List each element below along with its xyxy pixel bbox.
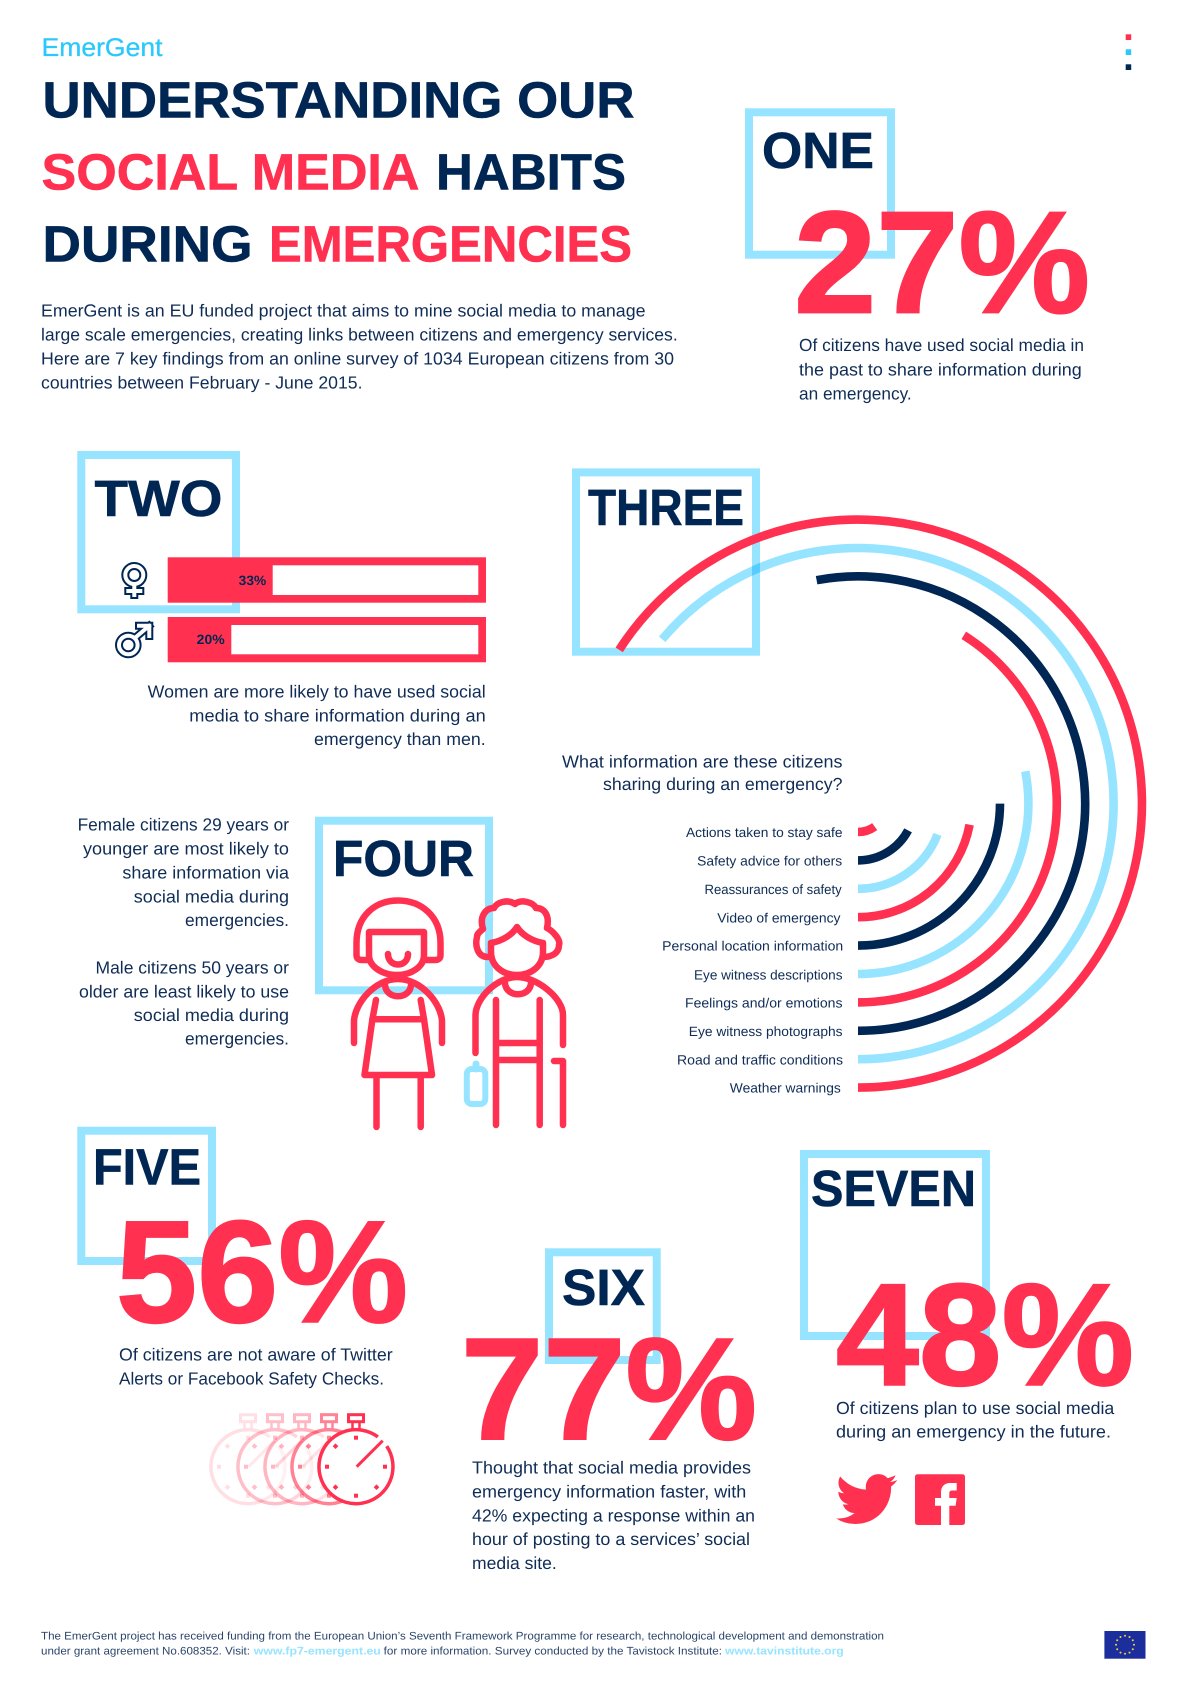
intro text: EmerGent is an EU funded project that aims to mine social media to manage [41,301,646,321]
chart labels: Personal location information [662,939,843,954]
number box four [319,821,489,990]
description six: media site. [472,1553,557,1573]
bar: men 20%: 20% [197,632,225,647]
chart labels: Reassurances of safety [704,882,842,897]
intro text: countries between February - June 2015. [41,372,362,392]
description four: share information via [122,862,289,882]
number box seven [804,1154,986,1336]
number box five [81,1131,212,1261]
title: HABITS [436,144,626,201]
description five [119,1345,393,1389]
chart labels: Weather warnings [730,1081,841,1096]
description one: Of citizens have used social media in [799,335,1084,355]
panel: finding three [562,472,1142,1096]
description four: younger are most likely to [83,839,289,859]
footer text: www.tavinstitute.org [724,1645,844,1657]
panel: finding five [81,1131,408,1504]
description four: emergencies. [185,910,289,930]
description four: social media during [134,886,289,906]
icon: twitter bird [836,1474,897,1524]
icon: female symbol [125,566,143,595]
description five: Of citizens are not aware of Twitter [119,1345,393,1365]
icon: older woman [476,901,563,1125]
footer text: The EmerGent project has received funding from the European Union’s Seventh Framework Programme for research, technological development and demonstration [41,1630,884,1642]
description one: an emergency. [799,384,912,404]
chart labels: Eye witness descriptions [694,967,843,982]
title: EMERGENCIES [269,215,632,272]
intro text: large scale emergencies, creating links between citizens and emergency services. [41,325,678,345]
icon: male symbol [119,626,149,654]
logo: EmerGent: EmerGent [42,34,162,62]
number box one [749,112,891,255]
description four [78,815,289,1049]
panel: finding six [461,1252,757,1573]
number box six [549,1252,657,1360]
stat: 48%: 48% [836,1254,1134,1416]
radial arc chart [619,520,1142,1088]
title: DURING [42,215,252,272]
description six [472,1457,755,1573]
description six: 42% expecting a response within an [472,1506,755,1526]
bar: women 33%: 33% [239,573,266,588]
heading: ONE: ONE [762,122,874,179]
stat: 56%: 56% [116,1191,408,1353]
description six: emergency information faster, with [472,1481,746,1501]
description four: Male citizens 50 years or [96,957,289,977]
description two [148,681,486,749]
description two: emergency than men. [314,729,486,749]
question text [562,752,843,794]
icon: fading stopwatches [211,1415,393,1504]
description two: media to share information during an [189,705,486,725]
chart labels [662,825,843,1096]
description seven [836,1398,1115,1442]
bar: men 20% [168,617,486,662]
bar: women 33% [168,557,486,603]
heading: FOUR: FOUR [333,830,474,887]
heading: TWO: TWO [94,470,222,527]
title [42,71,634,272]
chart labels: Feelings and/or emotions [685,996,843,1010]
description seven: during an emergency in the future. [836,1422,1111,1442]
footer text: under grant agreement No.608352. Visit: [41,1645,250,1657]
heading: FIVE: FIVE [93,1139,201,1196]
icon: handbag [467,1064,485,1104]
stat: 77%: 77% [461,1308,757,1470]
description six: hour of posting to a services’ social [472,1529,750,1549]
description four: emergencies. [185,1029,289,1049]
icon: young woman [354,900,442,1127]
description four: Female citizens 29 years or [78,815,289,835]
description four: social media during [134,1005,289,1025]
question text: sharing during an emergency? [603,774,843,794]
description five: Alerts or Facebook Safety Checks. [119,1369,384,1389]
panel: finding seven [804,1154,1134,1525]
description six: Thought that social media provides [472,1457,751,1477]
title: UNDERSTANDING OUR [42,71,634,128]
footer text: www.fp7-emergent.eu [253,1645,381,1657]
chart labels: Actions taken to stay safe [686,825,842,840]
panel: finding four [78,815,563,1127]
footer text: for more information. Survey conducted by the Tavistock Institute: [384,1645,722,1657]
heading: THREE: THREE [588,479,744,536]
intro text: Here are 7 key findings from an online survey of 1034 European citizens from 30 [41,349,674,369]
intro text [41,301,678,392]
question text: What information are these citizens [562,752,843,772]
title: SOCIAL MEDIA [42,144,420,201]
description one [799,335,1084,404]
heading: SEVEN: SEVEN [811,1160,976,1217]
number box two [81,455,236,609]
chart labels: Safety advice for others [697,854,842,869]
panel: finding one [749,112,1090,404]
chart labels: Road and traffic conditions [677,1052,843,1067]
icon: facebook [915,1474,965,1525]
description two: Women are more likely to have used social [148,681,486,701]
icon: EU flag [1104,1631,1146,1659]
panel: finding two [81,455,486,749]
number box three [576,472,756,652]
chart labels: Video of emergency [717,910,841,926]
decorative menu dots [1126,34,1131,70]
heading: SIX: SIX [562,1259,645,1316]
stat: 27%: 27% [794,181,1090,343]
description seven: Of citizens plan to use social media [836,1398,1115,1418]
description four: older are least likely to use [79,981,289,1001]
footer text [41,1630,884,1657]
description one: the past to share information during [799,360,1082,380]
chart labels: Eye witness photographs [689,1024,843,1039]
